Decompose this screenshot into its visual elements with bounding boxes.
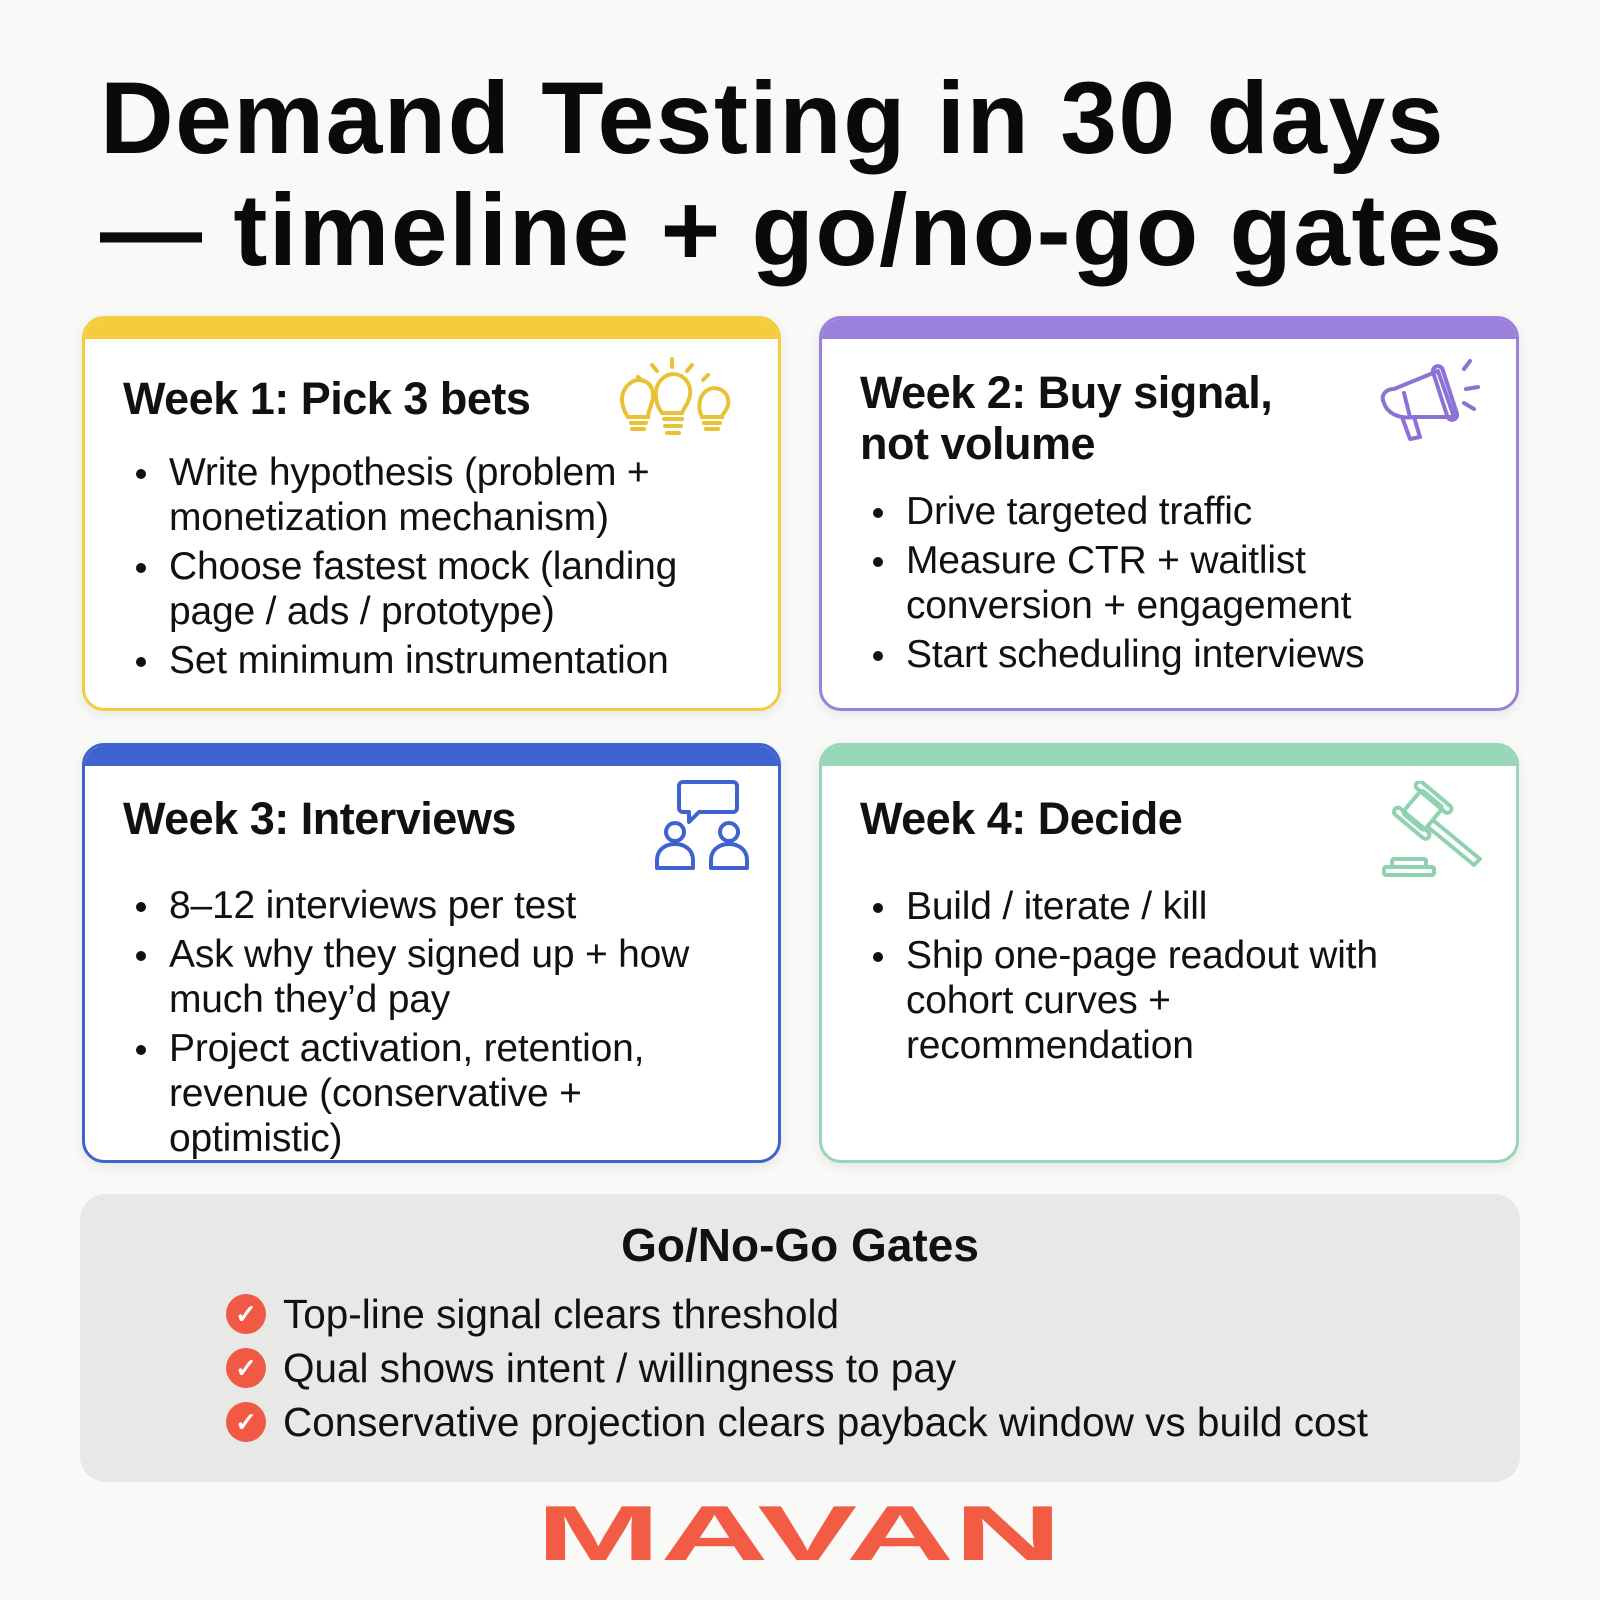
heading: week 2: not volume (860, 418, 1095, 469)
bullets: week 4: Build / iterate / kill (906, 885, 1207, 928)
bullets: week 2: Measure CTR + waitlist (906, 539, 1306, 582)
panel: week 4 (819, 743, 1519, 1163)
bullets: week 3: Ask why they signed up + how (169, 933, 689, 976)
bullets: week 3: 8–12 interviews per test (169, 884, 576, 927)
panel: week 2 (819, 316, 1519, 711)
bullets: week 4: Ship one-page readout with (906, 934, 1378, 977)
heading: week 4: Week 4: Decide (860, 793, 1182, 844)
gate 3: ✓ (235, 1407, 257, 1437)
heading: week 2: Week 2: Buy signal, (860, 367, 1272, 418)
bullets: week 4 (873, 885, 1378, 1067)
bullets: week 2: Drive targeted traffic (906, 490, 1252, 533)
icon: interview people (655, 780, 749, 870)
bullets: week 2 (873, 490, 1364, 676)
bullets: week 3: revenue (conservative + (169, 1072, 582, 1115)
bullets: week 3 (136, 884, 690, 1160)
title: — timeline + go/no-go gates (100, 173, 1503, 287)
heading: week 2 (860, 367, 1272, 469)
gate 3: Conservative projection clears payback window vs build cost (283, 1399, 1368, 1445)
gate 2: ✓ (235, 1353, 257, 1383)
panel: week 1 (82, 316, 781, 711)
heading: week 3: Week 3: Interviews (123, 793, 516, 844)
icon: gavel (1382, 781, 1482, 877)
bullets: week 3: much they’d pay (169, 978, 450, 1021)
title (100, 61, 1503, 287)
bullets: week 2: conversion + engagement (906, 584, 1351, 627)
icon: light bulbs (620, 357, 730, 435)
bullets: week 1: monetization mechanism) (169, 496, 609, 539)
heading: week 1: Week 1: Pick 3 bets (123, 373, 530, 424)
panel: go/no-go gates (80, 1194, 1520, 1482)
bullets: week 3: optimistic) (169, 1117, 342, 1160)
panel: week 3 (82, 743, 781, 1163)
gate 1: ✓ (235, 1299, 257, 1329)
icon: megaphone (1380, 359, 1480, 441)
bullets: week 3: Project activation, retention, (169, 1027, 644, 1070)
title: Demand Testing in 30 days (100, 61, 1445, 175)
bullets: week 1: page / ads / prototype) (169, 590, 555, 633)
gate list (226, 1291, 1368, 1445)
bullets: week 2: Start scheduling interviews (906, 633, 1364, 676)
gate 1: Top-line signal clears threshold (283, 1291, 839, 1337)
heading: gates: Go/No-Go Gates (621, 1219, 979, 1271)
bullets: week 4: cohort curves + (906, 979, 1171, 1022)
bullets: week 1: Choose fastest mock (landing (169, 545, 677, 588)
bullets: week 4: recommendation (906, 1024, 1194, 1067)
gate 2: Qual shows intent / willingness to pay (283, 1345, 956, 1391)
bullets: week 1 (136, 451, 677, 682)
bullets: week 1: Write hypothesis (problem + (169, 451, 650, 494)
bullets: week 1: Set minimum instrumentation (169, 639, 669, 682)
